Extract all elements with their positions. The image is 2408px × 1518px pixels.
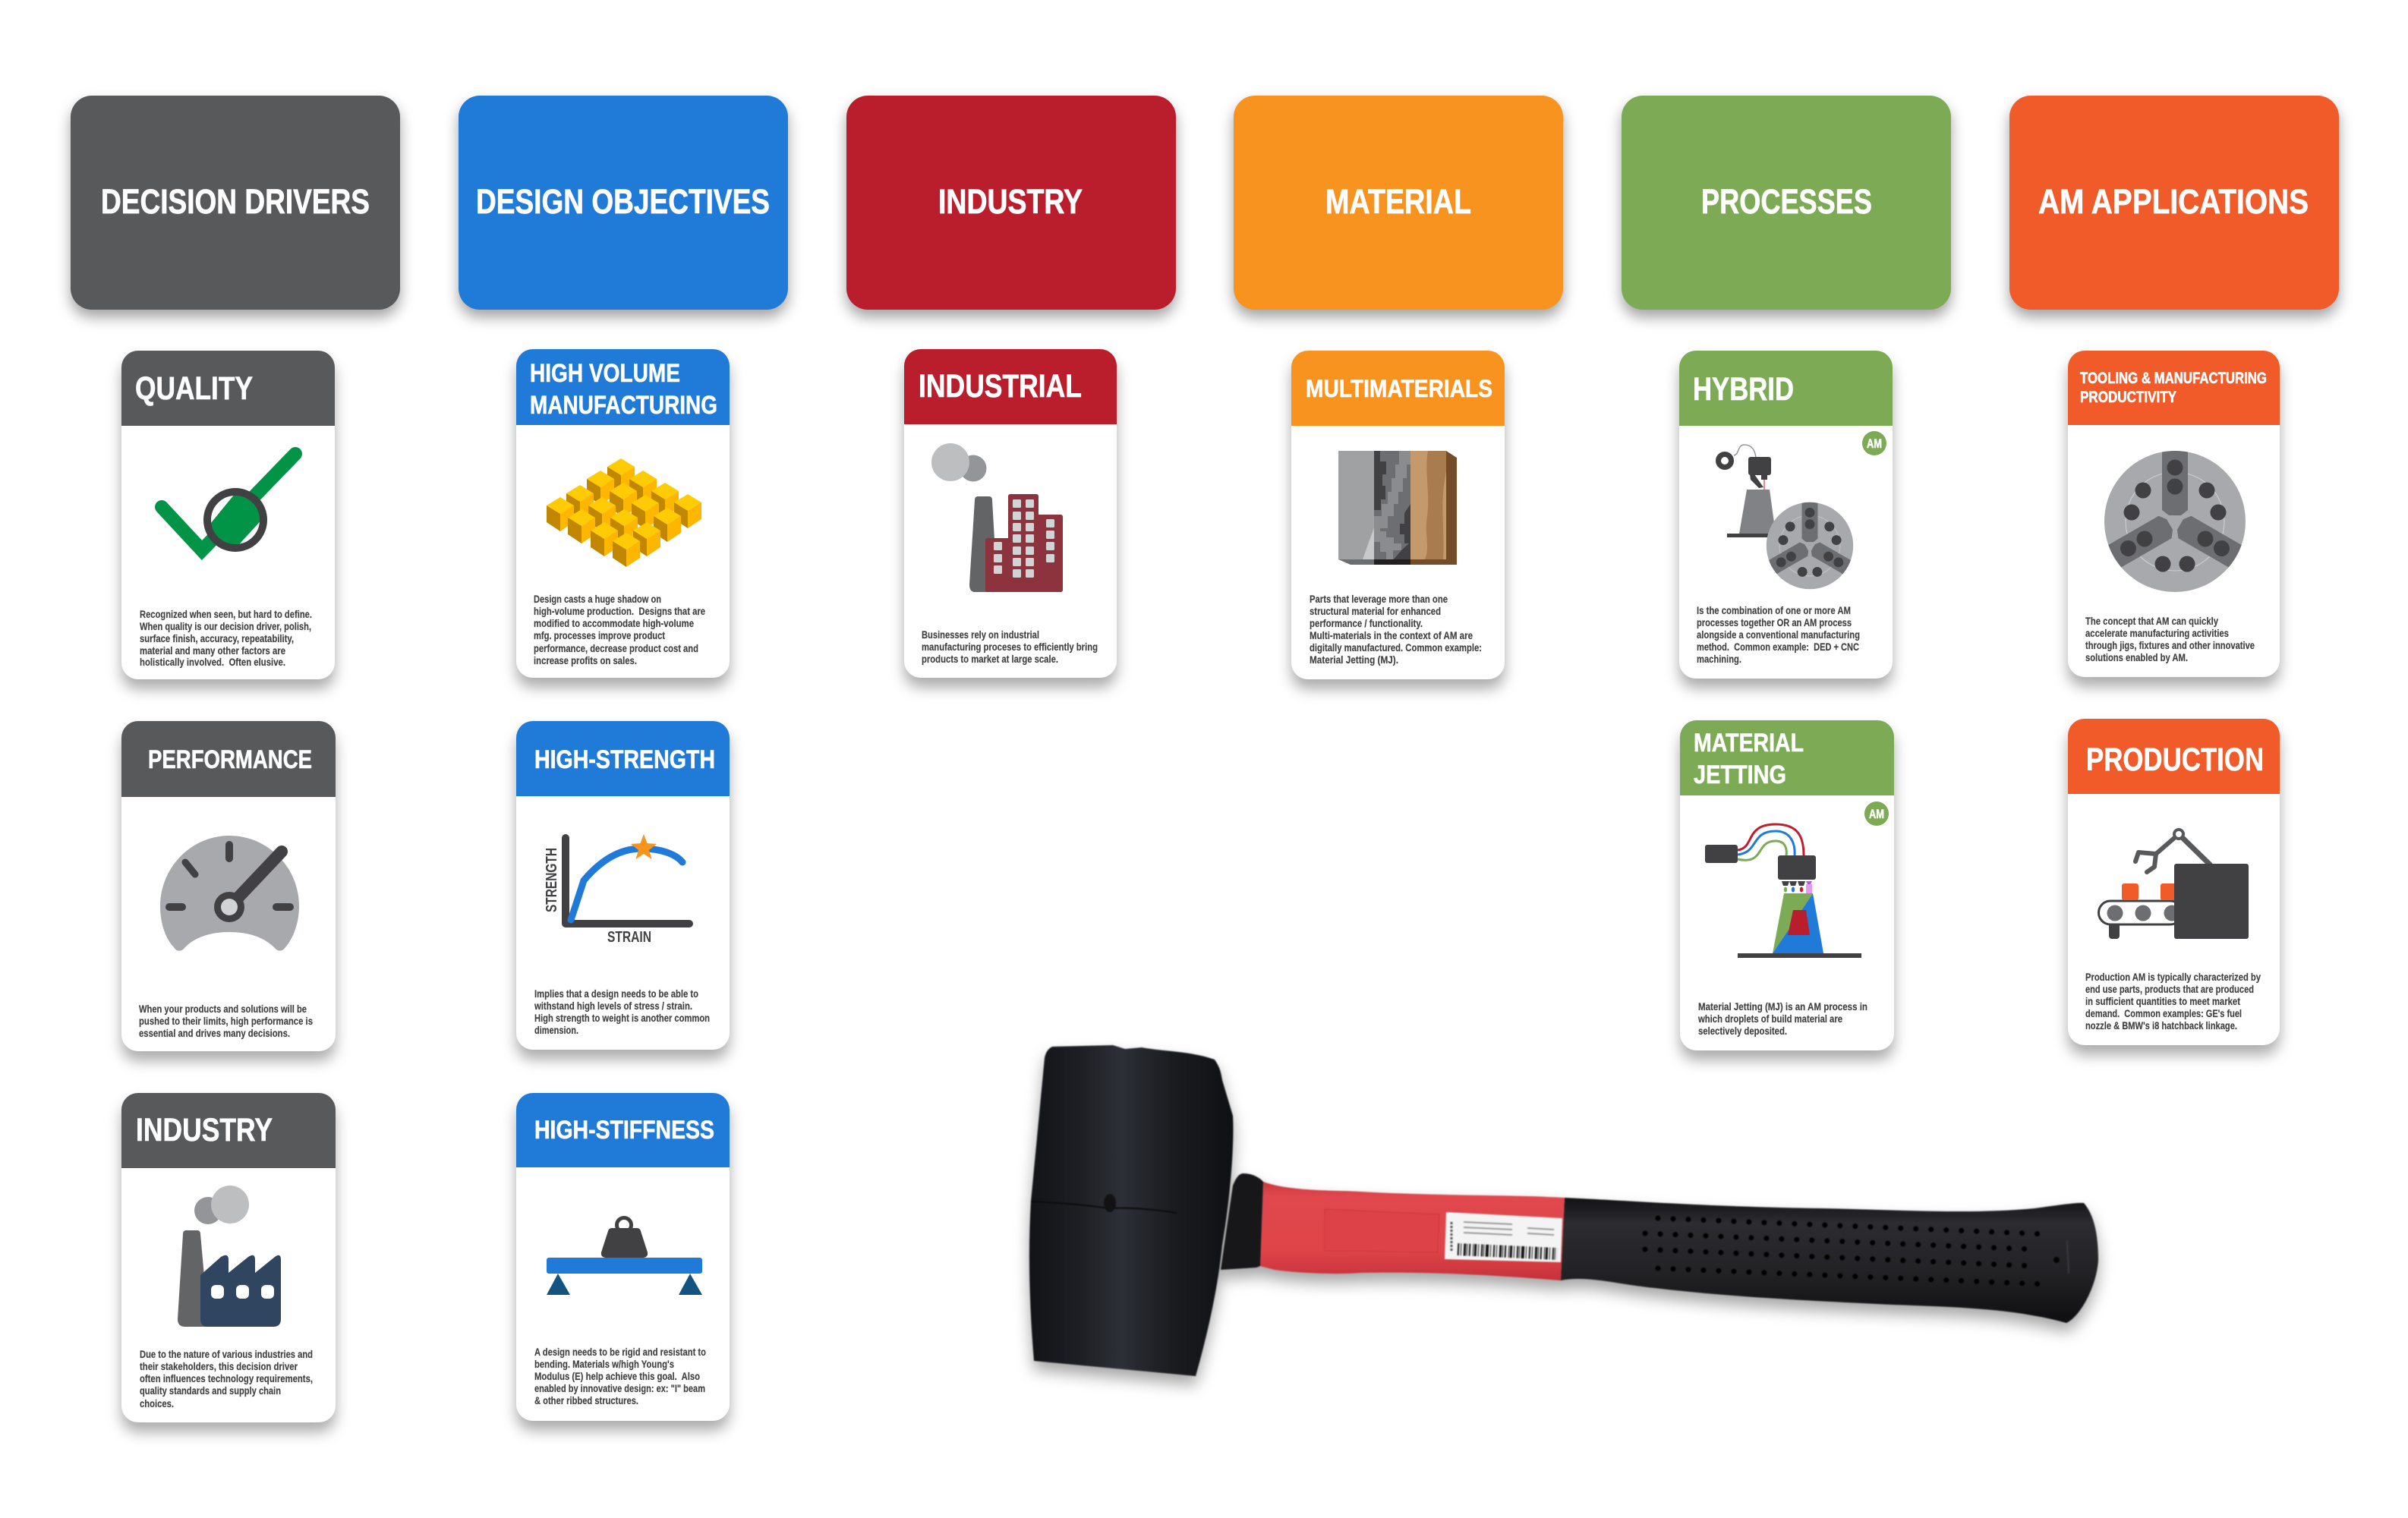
badge: am: AM <box>1869 807 1884 821</box>
card text: high-stiffness: A design needs to be rigid and resistant to <box>534 1346 706 1358</box>
card: tooling and manufacturing productivity <box>2068 351 2280 677</box>
card text: high-strength: High strength to weight is another common <box>534 1013 710 1024</box>
card text: hybrid: machining. <box>1697 653 1741 665</box>
card text: high volume manufacturing: Design casts a huge shadow on <box>534 594 661 605</box>
card text: industrial: Businesses rely on industrial <box>922 629 1039 641</box>
card: hybrid <box>1679 351 1893 679</box>
card text: high-stiffness: & other ribbed structures. <box>534 1395 638 1406</box>
card text: material jetting: which droplets of build material are <box>1697 1013 1842 1025</box>
icon: check mark under magnifier <box>162 454 295 560</box>
card heading: industry <box>121 1093 336 1168</box>
header: material <box>1234 96 1563 310</box>
card heading: hybrid: HYBRID <box>1693 371 1794 408</box>
icon: industrial buildings <box>931 443 1063 592</box>
card text: high volume manufacturing: modified to accommodate high-volume <box>534 618 694 629</box>
card heading: tooling and manufacturing productivity: PRODUCTIVITY <box>2080 389 2176 406</box>
image: rubber mallet <box>1029 1045 2098 1376</box>
header: processes: PROCESSES <box>1701 182 1872 221</box>
card heading: production <box>2068 719 2280 794</box>
icon: weight on beam <box>547 1217 702 1295</box>
card heading: quality: QUALITY <box>135 370 253 407</box>
card: multimaterials <box>1291 351 1505 679</box>
card text: high volume manufacturing <box>534 594 705 666</box>
card text: high volume manufacturing: increase profits on sales. <box>534 655 637 666</box>
card text: hybrid: Is the combination of one or more AM <box>1697 605 1851 616</box>
card text: quality: When quality is our decision driver, polish, <box>140 621 311 632</box>
mallet label and barcode <box>1445 1212 1562 1262</box>
card text: high volume manufacturing: mfg. processes improve product <box>534 630 665 641</box>
card heading: high volume manufacturing <box>516 349 730 425</box>
card heading: tooling and manufacturing productivity <box>2068 351 2280 425</box>
card heading: material jetting <box>1680 720 1894 795</box>
badge: am <box>1864 802 1889 826</box>
icon: machine chuck <box>2104 449 2246 592</box>
card text: quality <box>140 609 312 668</box>
card text: quality: surface finish, accuracy, repeatability, <box>140 633 294 644</box>
header: am applications <box>2009 96 2339 310</box>
card text: high volume manufacturing: performance, decrease product cost and <box>534 643 698 654</box>
card: high-strength <box>516 721 730 1050</box>
card text: material jetting: Material Jetting (MJ) is an AM process in <box>1698 1001 1867 1013</box>
card heading: multimaterials <box>1291 351 1505 426</box>
card text: production <box>2085 972 2261 1031</box>
header: material: MATERIAL <box>1325 182 1471 221</box>
card text: industrial: products to market at large scale. <box>922 653 1058 665</box>
card text: multimaterials: performance / functionality. <box>1310 618 1423 629</box>
card text: performance: When your products and solutions will be <box>139 1003 307 1015</box>
card text: multimaterials <box>1310 594 1482 666</box>
card text: high-strength: dimension. <box>534 1025 578 1036</box>
card heading: high volume manufacturing: HIGH VOLUME <box>530 359 680 388</box>
card: performance <box>121 721 336 1051</box>
card heading: high-stiffness: HIGH-STIFFNESS <box>534 1116 714 1145</box>
card text: production: in sufficient quantities to meet market <box>2085 996 2240 1007</box>
card text: performance <box>139 1003 313 1039</box>
card text: industry: choices. <box>140 1398 174 1409</box>
card text: material jetting: selectively deposited. <box>1698 1025 1787 1037</box>
card text: tooling: The concept that AM can quickly <box>2085 616 2218 627</box>
header: processes <box>1622 96 1951 310</box>
card text: multimaterials: Parts that leverage more than one <box>1310 594 1448 605</box>
card text: production: nozzle & BMW's i8 hatchback linkage. <box>2085 1020 2237 1031</box>
mallet grip <box>1561 1198 2098 1323</box>
card heading: hybrid <box>1679 351 1893 426</box>
header: design objectives: DESIGN OBJECTIVES <box>476 182 770 221</box>
card text: hybrid: processes together OR an AM process <box>1697 617 1852 628</box>
card heading: industrial <box>904 349 1117 424</box>
mallet collar <box>1221 1173 1263 1270</box>
icon: factory with smoke <box>178 1186 281 1327</box>
card text: production: end use parts, products that are produced <box>2085 984 2254 995</box>
card text: high-strength <box>534 988 710 1036</box>
header: industry <box>846 96 1176 310</box>
card: production <box>2068 719 2280 1045</box>
chart icon: stress strain curve: STRENGTH <box>544 848 560 912</box>
card text: industrial: manufacturing proceses to efficiently bring <box>922 641 1098 653</box>
card text: industry: their stakeholders, this decision driver <box>140 1361 298 1372</box>
card text: performance: essential and drives many decisions. <box>139 1028 290 1039</box>
card heading: performance: PERFORMANCE <box>148 745 312 774</box>
icon: speedometer gauge <box>160 836 299 951</box>
card: quality <box>121 351 335 679</box>
card text: hybrid <box>1697 605 1860 665</box>
card heading: industry: INDUSTRY <box>136 1112 273 1148</box>
card heading: production: PRODUCTION <box>2086 742 2264 778</box>
card text: multimaterials: structural material for enhanced <box>1310 606 1441 617</box>
card heading: industrial: INDUSTRIAL <box>919 368 1082 405</box>
card text: multimaterials: Material Jetting (MJ). <box>1310 654 1398 666</box>
header: decision drivers: DECISION DRIVERS <box>101 182 370 221</box>
card heading: performance <box>121 721 336 797</box>
card: high volume manufacturing <box>516 349 730 678</box>
chart icon: stress strain curve <box>544 834 689 946</box>
badge: am: AM <box>1867 436 1882 451</box>
card text: tooling <box>2085 616 2255 663</box>
card heading: high-strength <box>516 721 730 796</box>
card text: tooling: through jigs, fixtures and other innovative <box>2085 640 2255 651</box>
card text: material jetting <box>1697 1001 1867 1037</box>
card text: hybrid: method. Common example: DED + CNC <box>1697 641 1859 653</box>
card text: high-stiffness: enabled by innovative design: ex: "I" beam <box>534 1383 705 1394</box>
card text: quality: material and many other factors are <box>140 645 285 657</box>
card heading: material jetting: JETTING <box>1694 761 1786 789</box>
header: am applications: AM APPLICATIONS <box>2038 182 2309 221</box>
card text: quality: Recognized when seen, but hard to define. <box>140 609 312 620</box>
card text: industry: Due to the nature of various industries and <box>140 1349 313 1360</box>
card text: high-strength: withstand high levels of stress / strain. <box>534 1000 692 1012</box>
icon: robot arm and conveyor <box>2098 830 2249 939</box>
card heading: tooling and manufacturing productivity: TOOLING & MANUFACTURING <box>2080 370 2267 387</box>
card text: industry: quality standards and supply chain <box>140 1385 281 1397</box>
badge: am <box>1862 431 1886 455</box>
icon: hybrid machine with chuck <box>1719 445 1853 589</box>
card: material jetting <box>1680 720 1894 1050</box>
card text: high-stiffness <box>534 1346 706 1406</box>
chart icon: stress strain curve: STRAIN <box>607 929 651 946</box>
card heading: high-strength: HIGH-STRENGTH <box>534 745 715 774</box>
header: decision drivers <box>71 96 400 310</box>
card heading: high volume manufacturing: MANUFACTURING <box>530 391 717 420</box>
card text: multimaterials: digitally manufactured. Common example: <box>1310 642 1482 653</box>
icon: material jetting machine <box>1705 824 1861 958</box>
card heading: material jetting: MATERIAL <box>1694 729 1804 757</box>
card: industry <box>121 1093 336 1422</box>
header: design objectives <box>459 96 788 310</box>
card text: performance: pushed to their limits, high performance is <box>139 1016 313 1027</box>
icon: isometric yellow cubes <box>547 458 701 567</box>
card heading: high-stiffness <box>516 1093 730 1167</box>
card heading: quality <box>121 351 335 426</box>
card text: high-stiffness: bending. Materials w/high Young's <box>534 1359 674 1370</box>
card text: industry: often influences technology requirements, <box>140 1373 313 1384</box>
card: industrial <box>904 349 1117 678</box>
icon: layered material block <box>1338 451 1457 565</box>
card text: tooling: accelerate manufacturing activities <box>2085 628 2229 639</box>
card text: hybrid: alongside a conventional manufacturing <box>1697 629 1860 641</box>
card text: production: demand. Common examples: GE's fuel <box>2085 1008 2242 1019</box>
card text: high volume manufacturing: high-volume production. Designs that are <box>534 606 705 617</box>
header: industry: INDUSTRY <box>938 182 1083 221</box>
card text: industrial <box>922 629 1098 665</box>
card text: tooling: solutions enabled by AM. <box>2085 652 2188 663</box>
card text: production: Production AM is typically characterized by <box>2085 972 2261 983</box>
mallet red shaft <box>1260 1182 1565 1280</box>
card: high-stiffness <box>516 1093 730 1421</box>
mallet head <box>1029 1045 1233 1376</box>
card text: high-stiffness: Modulus (E) help achieve this goal. Also <box>534 1371 700 1382</box>
card heading: multimaterials: MULTIMATERIALS <box>1306 375 1492 402</box>
card text: high-strength: Implies that a design needs to be able to <box>534 988 698 1000</box>
card text: quality: holistically involved. Often elusive. <box>140 657 285 668</box>
card text: industry <box>140 1349 313 1409</box>
card text: multimaterials: Multi-materials in the context of AM are <box>1310 630 1473 641</box>
